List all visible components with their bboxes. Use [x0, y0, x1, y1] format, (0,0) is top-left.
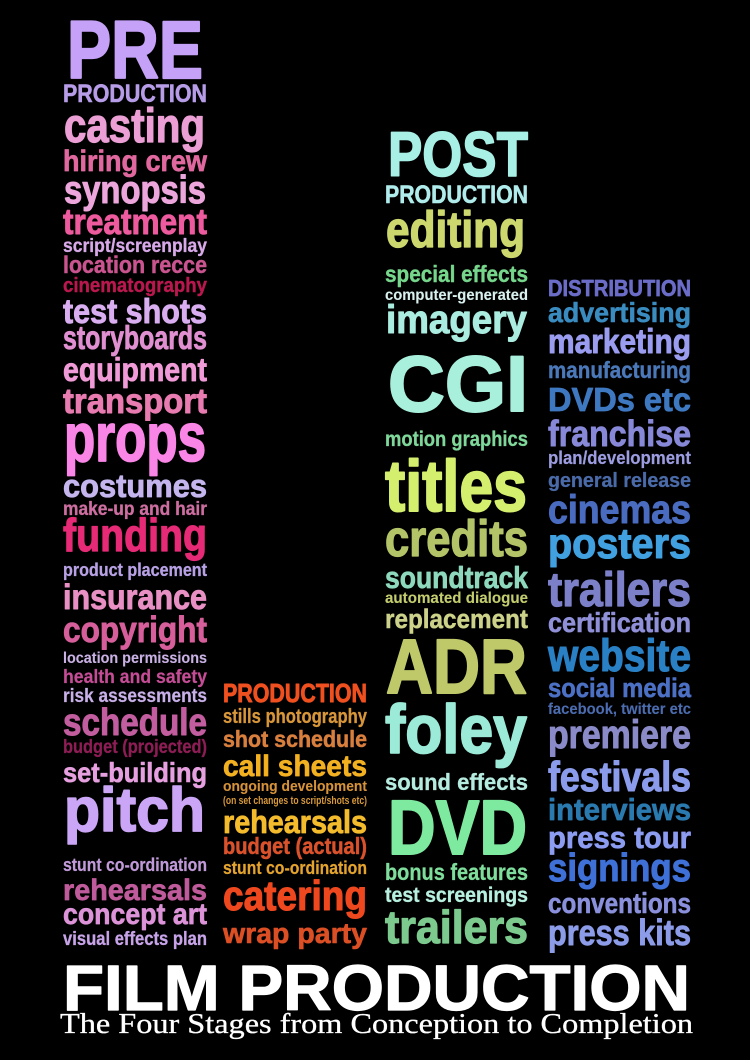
term: imagery: imagery: [386, 298, 528, 342]
term: computer-generated: computer-generated: [385, 287, 528, 304]
term: sound effects: sound effects: [385, 769, 528, 795]
term: location recce: location recce: [63, 252, 207, 279]
term: manufacturing: manufacturing: [548, 357, 691, 383]
title block: [60, 952, 693, 1040]
term: franchise: franchise: [548, 413, 691, 454]
heading: DISTRIBUTION: DISTRIBUTION: [548, 275, 691, 301]
term: health and safety: health and safety: [63, 667, 207, 688]
term: concept art: concept art: [63, 898, 207, 931]
term: press kits: press kits: [548, 912, 691, 953]
term: festivals: festivals: [548, 753, 691, 800]
term: insurance: insurance: [63, 578, 207, 617]
term: location permissions: location permissions: [63, 650, 207, 667]
term: props: props: [64, 399, 206, 476]
term: wrap party: wrap party: [222, 918, 367, 950]
term: premiere: premiere: [548, 713, 691, 757]
term: website: website: [547, 630, 691, 681]
term: special effects: special effects: [385, 261, 528, 287]
term: budget (projected): budget (projected): [63, 737, 207, 758]
heading: POST: POST: [388, 120, 528, 190]
subtitle: The Four Stages from Conception to Completion: [60, 1009, 693, 1040]
term: make-up and hair: make-up and hair: [63, 499, 208, 520]
term: CGI: CGI: [388, 339, 528, 428]
term: transport: transport: [63, 382, 207, 421]
term: stunt co-ordination: stunt co-ordination: [63, 855, 207, 875]
term: hiring crew: hiring crew: [63, 145, 208, 178]
term: test shots: test shots: [63, 293, 207, 331]
term: catering: catering: [223, 872, 367, 919]
term: credits: credits: [385, 510, 528, 567]
term: editing: editing: [386, 201, 525, 258]
term: ongoing development: ongoing development: [223, 778, 367, 795]
term: cinemas: cinemas: [548, 488, 691, 532]
term: DVD: DVD: [388, 785, 527, 871]
term: treatment: treatment: [63, 201, 207, 242]
term: trailers: trailers: [385, 901, 528, 953]
term: general release: general release: [548, 470, 691, 492]
term: casting: casting: [64, 100, 205, 153]
term: risk assessments: risk assessments: [63, 686, 207, 707]
term: trailers: trailers: [548, 564, 691, 617]
term: signings: signings: [548, 847, 691, 890]
term: conventions: conventions: [548, 888, 691, 920]
term: schedule: schedule: [63, 702, 207, 744]
term: bonus features: bonus features: [385, 859, 528, 885]
term: advertising: advertising: [548, 297, 691, 328]
term: set-building: set-building: [63, 757, 207, 788]
term: copyright: copyright: [63, 609, 207, 650]
term: stunt co-ordination: stunt co-ordination: [223, 858, 367, 878]
term: ADR: ADR: [386, 624, 527, 710]
term: call sheets: call sheets: [223, 750, 367, 783]
panel: production column: [222, 678, 368, 950]
term: DVDs etc: DVDs etc: [548, 381, 691, 418]
term: certification: certification: [548, 607, 691, 638]
term: interviews: interviews: [548, 792, 691, 827]
term: rehearsals: rehearsals: [63, 874, 207, 907]
term: posters: posters: [548, 520, 691, 568]
term: stills photography: stills photography: [223, 706, 368, 728]
term: facebook, twitter etc: facebook, twitter etc: [548, 701, 691, 718]
title: FILM PRODUCTION: FILM PRODUCTION: [63, 952, 690, 1024]
term: equipment: equipment: [63, 351, 207, 388]
term: script/screenplay: script/screenplay: [63, 236, 207, 257]
panel: distribution column: [547, 275, 692, 953]
term: test screenings: test screenings: [385, 884, 528, 907]
term: costumes: costumes: [63, 468, 207, 504]
term: marketing: marketing: [548, 323, 691, 361]
term: funding: funding: [63, 509, 207, 561]
term: soundtrack: soundtrack: [385, 560, 529, 595]
term: replacement: replacement: [385, 604, 528, 634]
term: on set changes note: (on set changes to script/shots etc): [223, 795, 367, 807]
term: titles: titles: [385, 447, 527, 527]
term: motion graphics: motion graphics: [385, 428, 528, 451]
heading: PRE: PRE: [67, 5, 203, 96]
term: storyboards: storyboards: [63, 319, 207, 356]
term: cinematography: cinematography: [63, 275, 208, 297]
term: rehearsals: rehearsals: [223, 804, 367, 840]
term: product placement: product placement: [63, 560, 207, 580]
panel: post production column: [385, 120, 529, 953]
heading: PRODUCTION: PRODUCTION: [63, 80, 207, 108]
term: social media: social media: [548, 673, 692, 703]
heading: PRODUCTION: PRODUCTION: [223, 678, 367, 708]
term: shot schedule: shot schedule: [223, 726, 367, 752]
heading: PRODUCTION: PRODUCTION: [385, 181, 528, 209]
term: plan/development: plan/development: [548, 448, 691, 468]
term: automated dialogue: automated dialogue: [385, 590, 528, 607]
term: pitch: pitch: [64, 776, 205, 845]
term: press tour: press tour: [548, 820, 691, 855]
term: synopsis: synopsis: [64, 169, 206, 212]
term: foley: foley: [385, 691, 527, 768]
term: visual effects plan: visual effects plan: [63, 929, 207, 950]
panel: pre production column: [63, 5, 208, 950]
term: budget (actual): budget (actual): [223, 833, 367, 859]
